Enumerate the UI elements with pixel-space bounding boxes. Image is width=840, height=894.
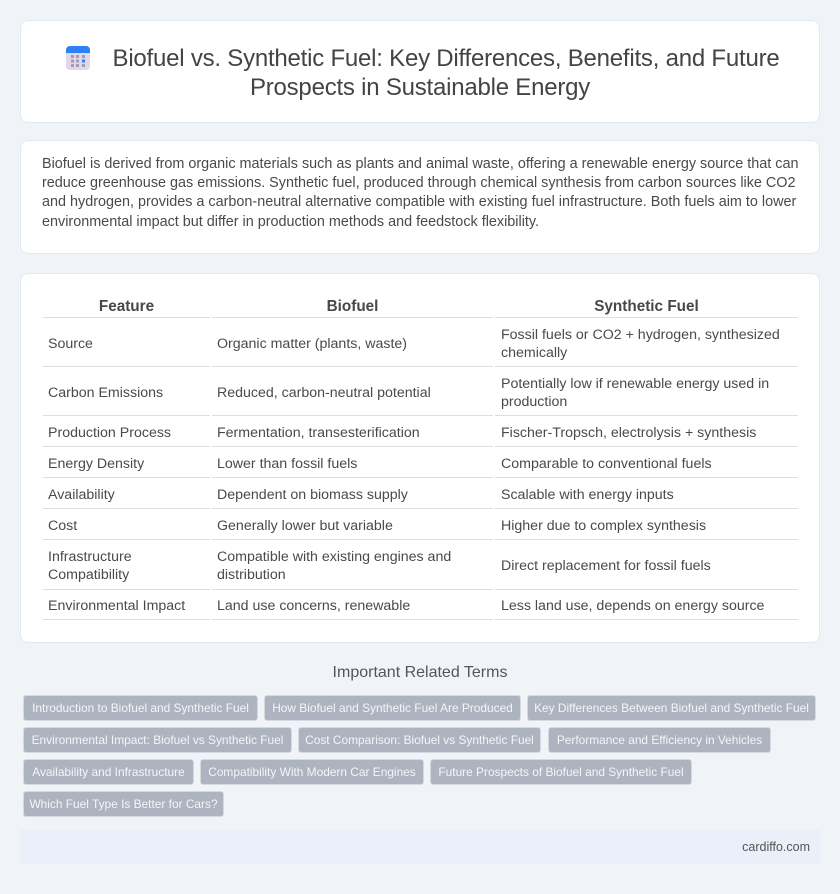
footer bar [20, 830, 820, 864]
tag: Availability and Infrastructure [32, 765, 185, 779]
comparison table: Compatible with existing engines and [217, 549, 451, 565]
comparison table: chemically [501, 345, 567, 361]
title [113, 45, 779, 101]
header panel [20, 20, 820, 123]
tag: Environmental Impact: Biofuel vs Synthetic Fuel [32, 733, 283, 747]
tag [430, 759, 692, 785]
panel: comparison table [20, 273, 820, 643]
panel: introduction [20, 140, 820, 254]
tag [298, 727, 541, 753]
text block: introduction: and hydrogen, provides a carbon-neutral alternative compatible with existing fuel infrastructure. Both fuels aim to lower [42, 194, 796, 210]
table header: Biofuel: Biofuel [327, 298, 378, 315]
comparison table: Scalable with energy inputs [501, 487, 674, 503]
tag [23, 727, 292, 753]
tag [548, 727, 771, 753]
tag [527, 695, 816, 721]
comparison table: Potentially low if renewable energy used in [501, 376, 769, 392]
tag: Introduction to Biofuel and Synthetic Fuel [32, 701, 249, 715]
tag: Compatibility With Modern Car Engines [208, 765, 416, 779]
tag: Future Prospects of Biofuel and Synthetic Fuel [438, 765, 684, 779]
row: Energy Density: Energy Density [48, 456, 144, 472]
tag [23, 695, 258, 721]
row: Source: Source [48, 336, 93, 352]
row: Cost: Cost [48, 518, 77, 534]
text block: introduction [42, 156, 798, 230]
comparison table: Generally lower but variable [217, 518, 393, 534]
tag: Cost Comparison: Biofuel vs Synthetic Fuel [305, 733, 534, 747]
comparison table: Fossil fuels or CO2 + hydrogen, synthesized [501, 327, 780, 343]
tag: How Biofuel and Synthetic Fuel Are Produced [272, 701, 513, 715]
row: Production Process: Production Process [48, 425, 171, 441]
comparison table: Dependent on biomass supply [217, 487, 408, 503]
row: Infrastructure Compatibility: Compatibility [48, 567, 129, 583]
comparison table: Higher due to complex synthesis [501, 518, 706, 534]
table header: Synthetic Fuel: Synthetic Fuel [594, 298, 699, 315]
tag [23, 791, 224, 817]
comparison table [43, 298, 798, 620]
comparison table: production [501, 394, 567, 410]
comparison table: distribution [217, 567, 286, 583]
comparison table: Organic matter (plants, waste) [217, 336, 407, 352]
row: Environmental Impact: Environmental Impact [48, 598, 185, 614]
comparison table: Fischer-Tropsch, electrolysis + synthesis [501, 425, 756, 441]
table header: Feature: Feature [99, 298, 154, 315]
comparison table: Direct replacement for fossil fuels [501, 558, 711, 574]
tag: Performance and Efficiency in Vehicles [557, 733, 762, 747]
icon: calendar [66, 46, 90, 70]
comparison table: Land use concerns, renewable [217, 598, 410, 614]
comparison table: Lower than fossil fuels [217, 456, 357, 472]
comparison table: Less land use, depends on energy source [501, 598, 764, 614]
tag: Which Fuel Type Is Better for Cars? [29, 797, 218, 811]
comparison table: Reduced, carbon-neutral potential [217, 385, 431, 401]
text block: introduction: environmental impact but differ in production methods and feedstock flexibility. [42, 214, 539, 230]
title: Biofuel vs. Synthetic Fuel: Key Differences, Benefits, and Future [113, 45, 779, 72]
tag: Key Differences Between Biofuel and Synthetic Fuel [534, 701, 809, 715]
tag [264, 695, 521, 721]
comparison table: Fermentation, transesterification [217, 425, 420, 441]
tag [200, 759, 424, 785]
row: Availability: Availability [48, 487, 115, 503]
tag list [23, 695, 816, 817]
row: Carbon Emissions: Carbon Emissions [48, 385, 163, 401]
row: Infrastructure Compatibility [48, 549, 132, 583]
text block: introduction: reduce greenhouse gas emissions. Synthetic fuel, produced through chemical synthesis from carbon sources like CO2 [42, 175, 796, 191]
heading: Important Related Terms: Important Related Terms [333, 664, 507, 681]
row: Infrastructure Compatibility: Infrastructure [48, 549, 132, 565]
footer text: cardiffo.com [742, 840, 810, 854]
comparison table: Comparable to conventional fuels [501, 456, 712, 472]
title: Prospects in Sustainable Energy [250, 74, 590, 101]
tag [23, 759, 194, 785]
text block: introduction: Biofuel is derived from organic materials such as plants and animal waste, offering a renewable energy source that can [42, 156, 798, 172]
